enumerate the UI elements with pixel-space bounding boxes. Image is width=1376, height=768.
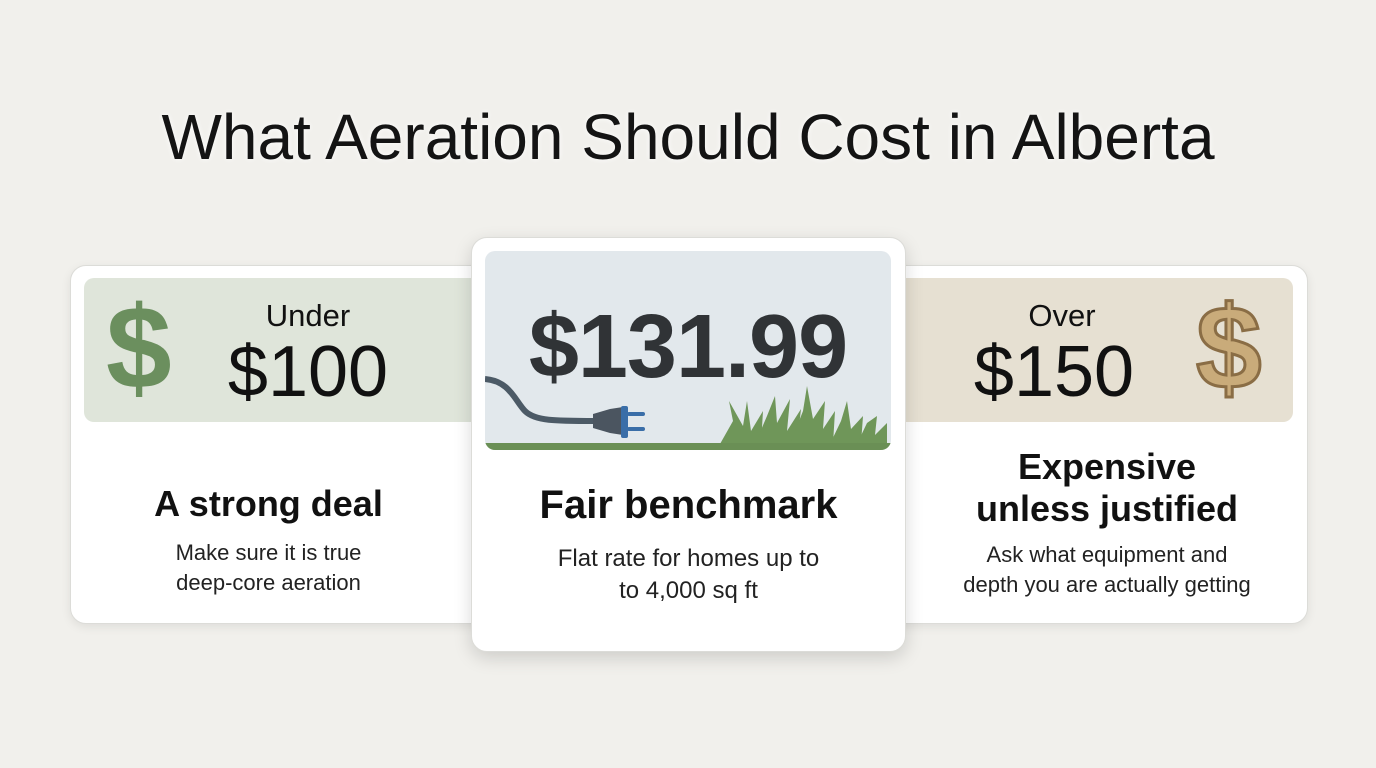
price: $150: $150 [974,332,1134,412]
illustration: plug and grass [485,376,890,450]
header band green [84,278,484,422]
heading: Expensive unless justified: Expensive [1018,446,1196,487]
heading: A strong deal: A strong deal [154,483,383,524]
icon: gold dollar: $ [1196,282,1262,414]
panel: under $100 [70,265,492,624]
panel: over $150 [886,265,1308,624]
price: $100: $100 [228,332,388,412]
text: Over: Over [1028,298,1096,333]
heading: Fair benchmark: Fair benchmark [540,483,837,527]
description: Flat rate for homes up to [558,545,819,572]
description [558,545,819,604]
description: depth you are actually getting [963,572,1251,597]
description [176,540,361,595]
header band tan [894,278,1293,422]
heading: Expensive unless justified: unless justified [976,488,1238,529]
price: $131.99: $131.99 [529,297,847,397]
header band with illustration [485,251,891,450]
description [963,542,1251,597]
description: Make sure it is true [176,540,361,565]
heading: Expensive unless justified [976,446,1238,529]
description: to 4,000 sq ft [619,577,758,604]
title: What Aeration Should Cost in Alberta [161,101,1215,173]
text: Under: Under [266,298,350,333]
description: Ask what equipment and [987,542,1227,567]
panel: fair benchmark (center) [471,237,906,652]
description: deep-core aeration [176,570,361,595]
icon: green dollar: $ [106,282,172,414]
